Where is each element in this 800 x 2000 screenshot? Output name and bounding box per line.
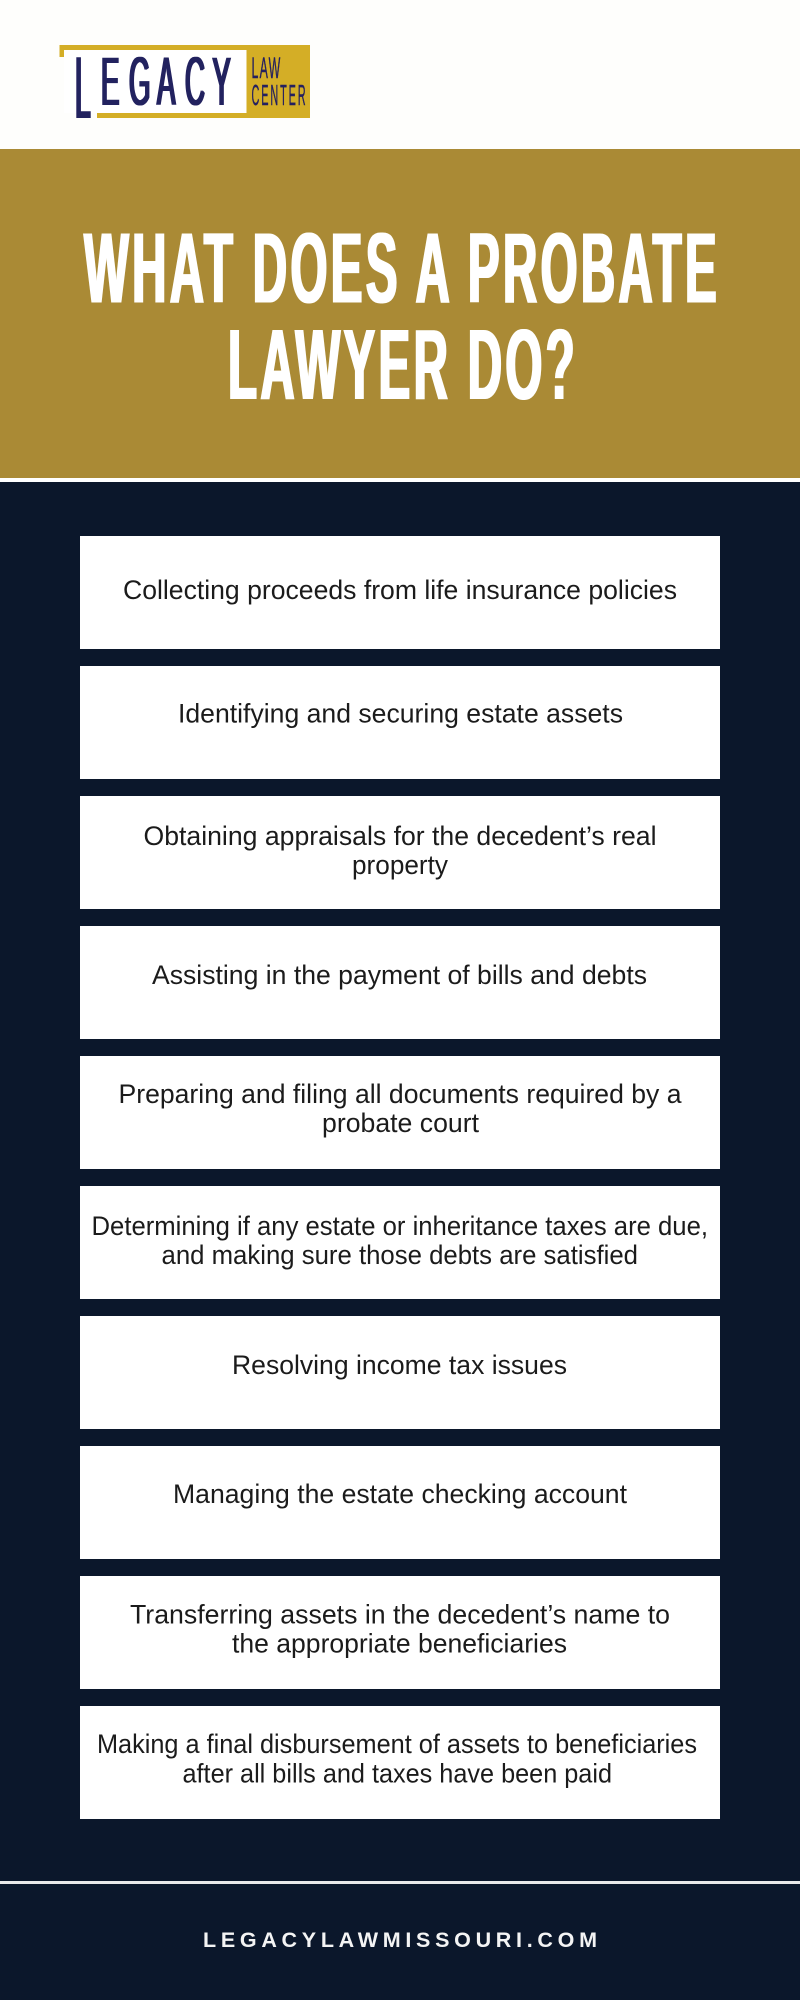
- card 2: securing estate assets: Identifying and securing estate assets: [178, 699, 623, 729]
- divider line under banner: [0, 478, 800, 482]
- card 3: obtaining appraisals: Obtaining appraisals for the decedent’s real: [144, 821, 656, 851]
- card 7: income tax issues: [80, 1316, 720, 1429]
- logo: Legacy Law Center: LAW: [252, 52, 282, 85]
- footer divider line: [0, 1881, 800, 1884]
- title banner: [0, 149, 800, 478]
- logo: Legacy Law Center: EGACY: [101, 43, 231, 121]
- card 10: final disbursement: [80, 1706, 720, 1819]
- card 3: obtaining appraisals: [80, 796, 720, 909]
- navy content panel: [0, 482, 800, 2000]
- card 1: collecting proceeds: Collecting proceeds from life insurance policies: [123, 575, 677, 605]
- card 6: estate and inheritance taxes: and making sure those debts are satisfied: [162, 1240, 638, 1270]
- title heading: [84, 213, 720, 421]
- card 5: filing documents: [80, 1056, 720, 1169]
- footer website url: LEGACYLAWMISSOURI.COM: [203, 1928, 597, 1952]
- logo: Legacy Law Center: [60, 39, 310, 137]
- card 2: securing estate assets: [80, 666, 720, 779]
- card 10: final disbursement: after all bills and taxes have been paid: [182, 1759, 612, 1789]
- card 8: estate checking account: Managing the estate checking account: [173, 1479, 628, 1509]
- card 3: obtaining appraisals: property: [352, 850, 449, 880]
- card 6: estate and inheritance taxes: [80, 1186, 720, 1299]
- card 9: transferring assets: [80, 1576, 720, 1689]
- card 9: transferring assets: the appropriate beneficiaries: [232, 1629, 567, 1659]
- card 7: income tax issues: Resolving income tax issues: [232, 1350, 567, 1380]
- card 1: collecting proceeds: [80, 536, 720, 649]
- card 4: payment of bills: [80, 926, 720, 1039]
- logo: Legacy Law Center: L: [75, 39, 91, 137]
- card 6: estate and inheritance taxes: Determining if any estate or inheritance taxes are due,: [92, 1211, 708, 1241]
- card 10: final disbursement: Making a final disbursement of assets to beneficiaries: [97, 1729, 697, 1759]
- card 5: filing documents: Preparing and filing all documents required by a: [118, 1079, 682, 1109]
- card 9: transferring assets: Transferring assets in the decedent’s name to: [130, 1600, 670, 1630]
- text: CENTER: [252, 80, 308, 112]
- card 8: estate checking account: [80, 1446, 720, 1559]
- card 5: filing documents: probate court: [322, 1108, 480, 1138]
- card 4: payment of bills: Assisting in the payment of bills and debts: [152, 960, 647, 990]
